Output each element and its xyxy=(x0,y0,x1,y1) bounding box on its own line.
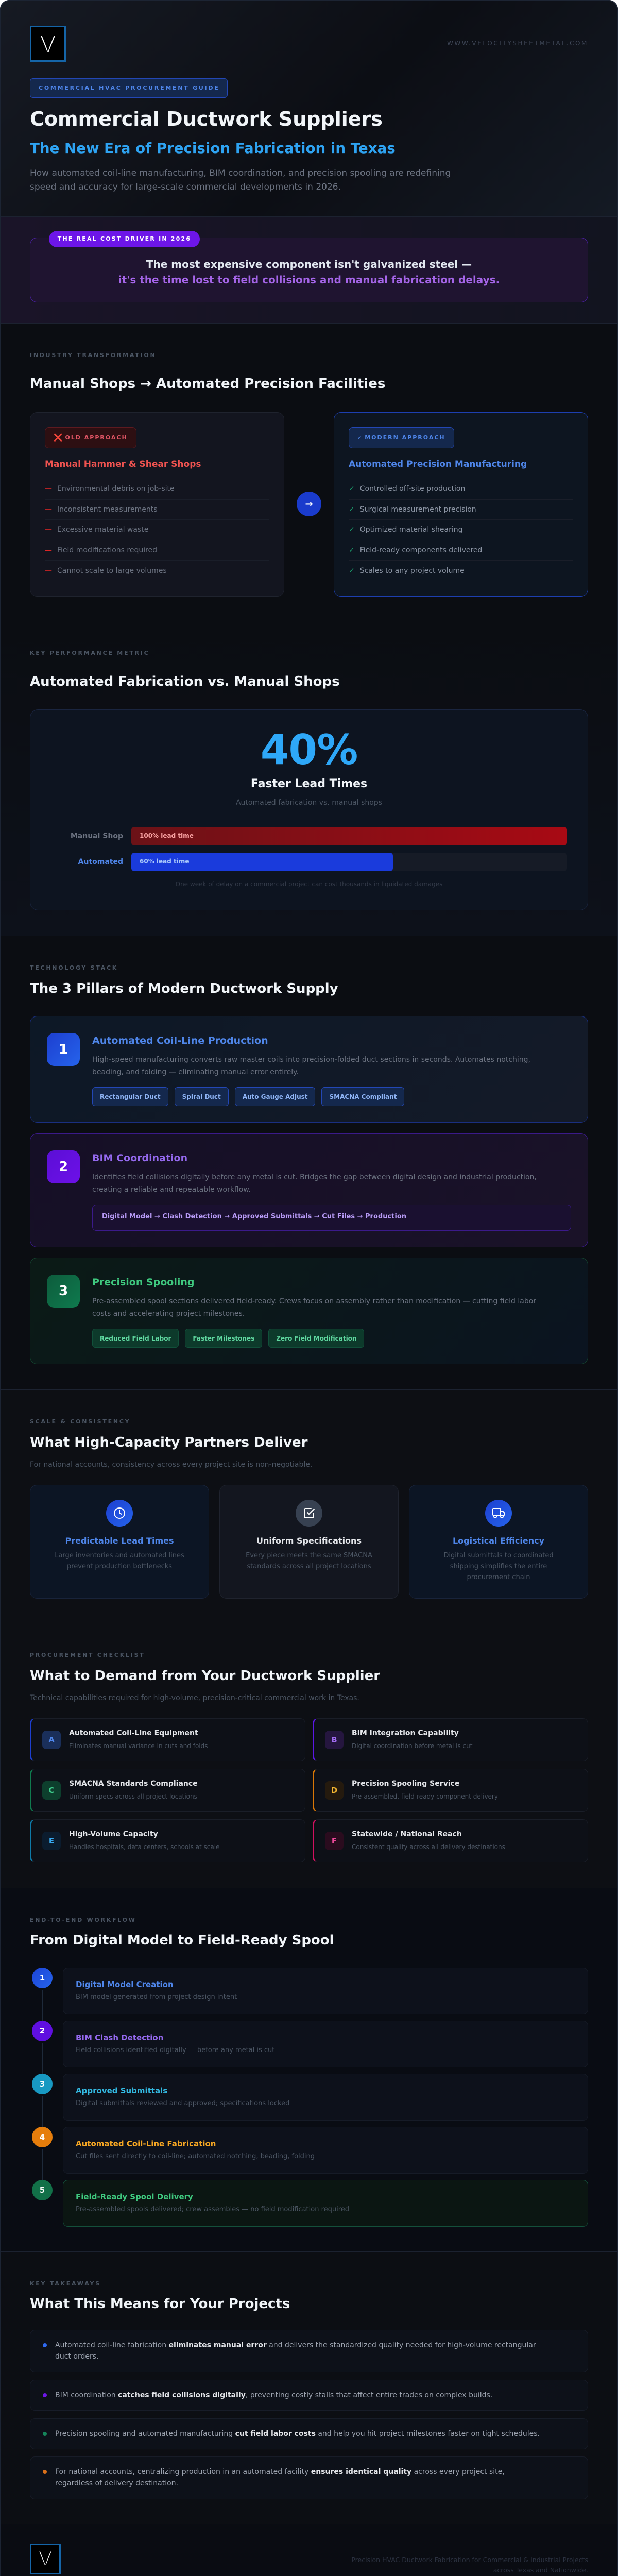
metric footnote: One week of delay on a commercial project can cost thousands in liquidated damages xyxy=(176,880,442,888)
checklist item D: Pre-assembled, field-ready component delivery xyxy=(352,1793,498,1800)
website url: WWW.VELOCITYSHEETMETAL.COM xyxy=(447,40,588,47)
callout statement xyxy=(118,258,500,286)
old badge: OLD APPROACH xyxy=(65,434,128,441)
pillar number 1: 1 xyxy=(59,1042,68,1057)
step 1 xyxy=(32,1968,588,2021)
pillar tags: SMACNA Compliant xyxy=(329,1093,397,1100)
icon: truck xyxy=(485,1500,512,1527)
card text xyxy=(443,1552,554,1581)
footer logo xyxy=(30,2544,61,2574)
modern list: ✓ xyxy=(349,526,355,534)
card text xyxy=(55,1552,184,1570)
step 2: 2 xyxy=(40,2026,45,2036)
bar chart xyxy=(71,827,567,871)
pillar tags: Zero Field Modification xyxy=(276,1334,356,1342)
pillar 3 xyxy=(30,1258,588,1364)
checklist item E: E xyxy=(49,1836,54,1845)
section subtitle: For national accounts, consistency across every project site is non-negotiable. xyxy=(30,1461,312,1469)
section heading: What High-Capacity Partners Deliver xyxy=(30,1435,307,1450)
pillar tags: Rectangular Duct xyxy=(100,1093,161,1100)
footer tagline: across Texas and Nationwide. xyxy=(493,2566,588,2574)
section label: SCALE & CONSISTENCY xyxy=(30,1418,130,1425)
icon: checklist xyxy=(296,1500,322,1527)
card: predictable lead times xyxy=(30,1485,209,1599)
takeaway 1 xyxy=(30,2330,588,2372)
modern badge: MODERN APPROACH xyxy=(365,434,445,441)
metric sublabel: Automated fabrication vs. manual shops xyxy=(236,799,382,807)
checklist item F: Statewide / National Reach xyxy=(352,1830,462,1838)
section: end-to-end workflow xyxy=(0,1888,618,2252)
footer tagline: Precision HVAC Ductwork Fabrication for Commercial & Industrial Projects xyxy=(351,2556,588,2564)
checklist item C: SMACNA Standards Compliance xyxy=(69,1780,198,1788)
pillar description xyxy=(92,1297,536,1318)
footer logo: V xyxy=(39,2547,52,2570)
checklist item B xyxy=(313,1718,588,1761)
takeaway 2 xyxy=(30,2380,588,2411)
section label: INDUSTRY TRANSFORMATION xyxy=(30,352,156,359)
footer xyxy=(0,2524,618,2576)
modern list: ✓ xyxy=(349,546,355,554)
step 4 xyxy=(32,2127,588,2180)
section: industry transformation xyxy=(0,324,618,621)
step 2: Field collisions identified digitally — before any metal is cut xyxy=(76,2046,274,2054)
footer tagline xyxy=(351,2556,588,2574)
pillar tags: Spiral Duct xyxy=(182,1093,221,1100)
step 4: Cut files sent directly to coil-line; automated notching, beading, folding xyxy=(76,2153,315,2160)
checklist item D: D xyxy=(331,1786,337,1795)
section: key takeaways xyxy=(0,2252,618,2524)
step 3: Digital submittals reviewed and approved; specifications locked xyxy=(76,2099,289,2107)
intro paragraph: How automated coil-line manufacturing, BIM coordination, and precision spooling are redefining xyxy=(30,168,451,178)
big number: 40% xyxy=(261,726,357,774)
modern badge: ✓ xyxy=(357,434,362,441)
card: uniform specifications xyxy=(219,1485,399,1599)
panel: old approach xyxy=(30,412,284,597)
section: procurement checklist xyxy=(0,1623,618,1888)
section label: TECHNOLOGY STACK xyxy=(30,964,118,971)
manual bar: 100% lead time xyxy=(140,832,194,839)
pillar 1 xyxy=(30,1016,588,1123)
takeaway 4 xyxy=(30,2456,588,2499)
modern list: Surgical measurement precision xyxy=(360,505,476,514)
callout statement: The most expensive component isn't galvanized steel — xyxy=(146,258,472,270)
card title: Predictable Lead Times xyxy=(65,1536,174,1546)
callout pill label: THE REAL COST DRIVER IN 2026 xyxy=(58,235,191,242)
pillar description: beading, and folding — eliminating manual error entirely. xyxy=(92,1068,299,1076)
step 2 xyxy=(32,2021,588,2074)
checklist item E xyxy=(30,1819,305,1862)
checklist item E: High-Volume Capacity xyxy=(69,1830,158,1838)
takeaway 2: BIM coordination catches field collisions digitally, preventing costly stalls that affect entire trades on complex builds. xyxy=(55,2391,492,2399)
card text: standards across all project locations xyxy=(247,1563,371,1570)
modern list: Controlled off-site production xyxy=(360,485,465,493)
step 3: Approved Submittals xyxy=(76,2086,167,2095)
step 5 xyxy=(32,2180,588,2227)
takeaway 3 xyxy=(30,2418,588,2449)
checklist item B: BIM Integration Capability xyxy=(352,1729,459,1737)
hero header xyxy=(0,0,618,217)
intro paragraph: speed and accuracy for large-scale commercial developments in 2026. xyxy=(30,182,341,192)
card text: procurement chain xyxy=(467,1573,530,1581)
step 5: 5 xyxy=(40,2185,45,2195)
old list: — xyxy=(45,485,52,493)
takeaway 4: regardless of delivery destination. xyxy=(55,2479,178,2487)
arrow xyxy=(297,492,321,516)
checklist item D: Precision Spooling Service xyxy=(352,1780,459,1788)
modern list: Scales to any project volume xyxy=(360,567,465,575)
old title: Manual Hammer & Shear Shops xyxy=(45,459,201,469)
pillar 2 xyxy=(30,1133,588,1247)
old list: Inconsistent measurements xyxy=(57,505,158,514)
pillar number 3: 3 xyxy=(59,1283,68,1299)
section label: PROCUREMENT CHECKLIST xyxy=(30,1652,145,1658)
process flow xyxy=(92,1205,571,1231)
callout section: real cost driver xyxy=(0,217,618,324)
manual bar xyxy=(71,827,567,845)
step 5: Field-Ready Spool Delivery xyxy=(76,2192,193,2201)
card title: Logistical Efficiency xyxy=(453,1536,544,1546)
pillar number 2 xyxy=(47,1150,80,1183)
subtitle: The New Era of Precision Fabrication in Texas xyxy=(30,140,396,157)
takeaway 3: Precision spooling and automated manufacturing cut field labor costs and help you hit project milestones faster on tight schedules. xyxy=(55,2430,540,2438)
section heading: From Digital Model to Field-Ready Spool xyxy=(30,1933,334,1948)
section heading: The 3 Pillars of Modern Ductwork Supply xyxy=(30,981,338,996)
logo xyxy=(30,26,66,62)
old list: — xyxy=(45,567,52,575)
pillar title: BIM Coordination xyxy=(92,1153,187,1164)
section label: END-TO-END WORKFLOW xyxy=(30,1917,136,1923)
modern list: ✓ xyxy=(349,485,355,493)
old list: Field modifications required xyxy=(57,546,157,554)
pillar number 1 xyxy=(47,1033,80,1066)
step 3 xyxy=(32,2074,588,2127)
step 4: 4 xyxy=(40,2132,45,2142)
card text: prevent production bottlenecks xyxy=(67,1563,172,1570)
section: key performance metric xyxy=(0,621,618,936)
old list xyxy=(45,485,269,575)
checklist item B: Digital coordination before metal is cut xyxy=(352,1742,472,1750)
step 4: Automated Coil-Line Fabrication xyxy=(76,2139,216,2148)
checklist item D xyxy=(313,1769,588,1812)
pillar title: Automated Coil-Line Production xyxy=(92,1035,268,1046)
old list: Excessive material waste xyxy=(57,526,148,534)
checklist item A: Automated Coil-Line Equipment xyxy=(69,1729,198,1737)
callout statement: it's the time lost to field collisions and manual fabrication delays. xyxy=(118,274,500,286)
pillar tags: Auto Gauge Adjust xyxy=(243,1093,307,1100)
modern badge xyxy=(349,427,454,448)
metric label: Faster Lead Times xyxy=(251,777,367,790)
pillar description: creating a reliable and repeatable workflow. xyxy=(92,1185,251,1194)
checklist item A: A xyxy=(48,1735,55,1744)
old list: — xyxy=(45,526,52,534)
checklist item F xyxy=(313,1819,588,1862)
section heading: Automated Fabrication vs. Manual Shops xyxy=(30,674,340,689)
old list: Cannot scale to large volumes xyxy=(57,567,167,575)
step 5: Pre-assembled spools delivered; crew assembles — no field modification required xyxy=(76,2206,349,2213)
icon: clock xyxy=(106,1500,133,1527)
old list: — xyxy=(45,505,52,514)
step 2: BIM Clash Detection xyxy=(76,2033,163,2042)
modern list: ✓ xyxy=(349,505,355,514)
step 3: 3 xyxy=(40,2079,45,2089)
checklist item E: Handles hospitals, data centers, schools at scale xyxy=(69,1843,219,1851)
pillar tags: Faster Milestones xyxy=(193,1334,254,1342)
section heading: Manual Shops → Automated Precision Facilities xyxy=(30,376,385,392)
pillar description xyxy=(92,1173,537,1194)
modern list xyxy=(349,485,573,575)
card: logistical efficiency xyxy=(409,1485,588,1599)
section: technology stack xyxy=(0,936,618,1390)
checklist item A: Eliminates manual variance in cuts and folds xyxy=(69,1742,208,1750)
modern title: Automated Precision Manufacturing xyxy=(349,459,527,469)
section heading: What This Means for Your Projects xyxy=(30,2296,290,2312)
callout box xyxy=(30,238,588,302)
pillar description: costs and accelerating project milestones. xyxy=(92,1310,245,1318)
old badge xyxy=(45,427,136,448)
section heading: What to Demand from Your Ductwork Supplier xyxy=(30,1668,380,1684)
card title: Uniform Specifications xyxy=(256,1536,362,1546)
step 1: Digital Model Creation xyxy=(76,1980,174,1989)
automated bar xyxy=(78,853,567,871)
checklist item C: C xyxy=(48,1786,55,1795)
metric card xyxy=(30,709,588,910)
old badge: ❌ xyxy=(54,434,62,442)
old list: — xyxy=(45,546,52,554)
section label: KEY PERFORMANCE METRIC xyxy=(30,650,149,656)
guide badge: COMMERCIAL HVAC PROCUREMENT GUIDE xyxy=(39,84,220,91)
guide badge xyxy=(30,78,228,98)
pillar description: Identifies field collisions digitally before any metal is cut. Bridges the gap between digital design and industrial production, xyxy=(92,1173,537,1181)
step 1: 1 xyxy=(40,1973,45,1982)
pillar tags xyxy=(92,1087,404,1106)
modern list: ✓ xyxy=(349,567,355,575)
arrow: → xyxy=(305,499,313,509)
intro paragraph xyxy=(30,168,451,192)
process flow: Digital Model → Clash Detection → Approved Submittals → Cut Files → Production xyxy=(102,1213,406,1221)
section: scale and consistency xyxy=(0,1390,618,1623)
checklist item F: Consistent quality across all delivery destinations xyxy=(352,1843,505,1851)
pillar number 2: 2 xyxy=(59,1159,68,1175)
manual bar: Manual Shop xyxy=(71,832,123,840)
step 1: BIM model generated from project design intent xyxy=(76,1993,237,2001)
pillar tags xyxy=(92,1329,364,1348)
old list: Environmental debris on job-site xyxy=(57,485,175,493)
pillar description xyxy=(92,1056,530,1076)
section subtitle: Technical capabilities required for high-volume, precision-critical commercial work in Texas. xyxy=(30,1694,359,1702)
pillar description: High-speed manufacturing converts raw master coils into precision-folded duct sections in seconds. Automates notching, xyxy=(92,1056,530,1064)
checklist item A xyxy=(30,1718,305,1761)
automated bar: 60% lead time xyxy=(140,858,190,865)
automated bar: Automated xyxy=(78,858,123,866)
section label: KEY TAKEAWAYS xyxy=(30,2280,101,2287)
pillar number 3 xyxy=(47,1275,80,1308)
pillar description: Pre-assembled spool sections delivered field-ready. Crews focus on assembly rather than modification — cutting field labor xyxy=(92,1297,536,1306)
takeaway 1: Automated coil-line fabrication eliminates manual error and delivers the standardized quality needed for high-volume rectangular xyxy=(55,2341,536,2349)
card text: Every piece meets the same SMACNA xyxy=(246,1552,372,1560)
card text: shipping simplifies the entire xyxy=(450,1563,547,1570)
modern list: Field-ready components delivered xyxy=(360,546,482,554)
checklist item C: Uniform specs across all project locations xyxy=(69,1793,197,1800)
panel: modern approach xyxy=(334,412,588,597)
checklist item B: B xyxy=(331,1735,337,1744)
modern list: Optimized material shearing xyxy=(360,526,462,534)
callout pill label xyxy=(49,231,200,247)
title: Commercial Ductwork Suppliers xyxy=(30,108,383,130)
pillar title: Precision Spooling xyxy=(92,1277,195,1288)
checklist item C xyxy=(30,1769,305,1812)
card text: Large inventories and automated lines xyxy=(55,1552,184,1560)
card text: Digital submittals to coordinated xyxy=(443,1552,554,1560)
logo: V xyxy=(40,30,56,57)
card text xyxy=(246,1552,372,1570)
takeaway 4: For national accounts, centralizing production in an automated facility ensures identical quality across every project site, xyxy=(55,2468,505,2476)
checklist item F: F xyxy=(332,1836,337,1845)
takeaway 1: duct orders. xyxy=(55,2352,98,2361)
pillar tags: Reduced Field Labor xyxy=(100,1334,171,1342)
